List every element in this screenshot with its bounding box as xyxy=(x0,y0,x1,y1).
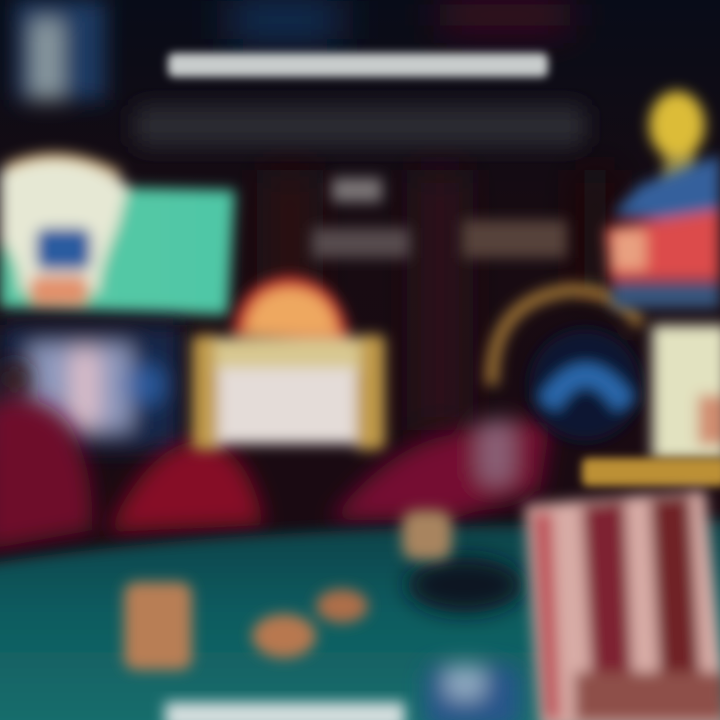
chip and puck: centre right xyxy=(407,557,523,613)
chip stack: left xyxy=(124,582,192,670)
chip: tan xyxy=(402,510,452,560)
panel: right lit machine xyxy=(652,325,720,460)
chip stack: middle xyxy=(252,589,368,658)
castle: yellow tower xyxy=(649,91,705,197)
table: green felt xyxy=(0,520,720,720)
panel: centre slot machine xyxy=(192,276,385,450)
castle: body xyxy=(605,155,720,308)
object: bottom blue xyxy=(425,665,520,720)
text block: centre captions xyxy=(312,178,567,258)
top backdrop shapes xyxy=(230,0,610,430)
figure: right players xyxy=(330,419,550,520)
gold ledge xyxy=(582,458,720,486)
subtitle band xyxy=(135,105,585,147)
card: bottom white xyxy=(165,702,405,720)
title xyxy=(168,53,548,77)
figure: left player xyxy=(0,362,92,550)
panel: left green screen xyxy=(0,157,235,315)
popcorn box xyxy=(525,490,720,720)
top left banner xyxy=(15,0,105,100)
icon: gold arc and blue wheel xyxy=(492,290,641,441)
figure: centre player xyxy=(108,440,264,532)
panel: left lower screen xyxy=(0,325,180,450)
